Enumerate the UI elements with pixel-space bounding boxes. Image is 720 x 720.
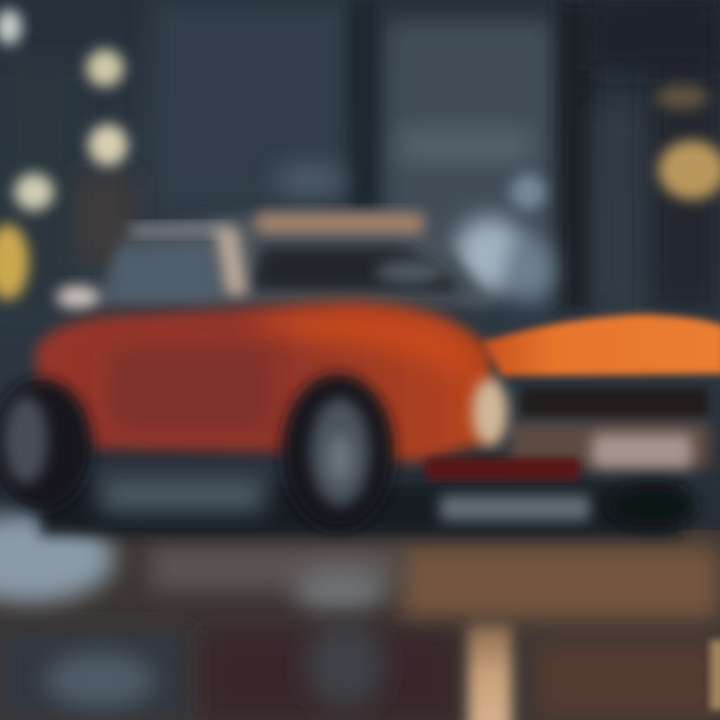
street lights: left side	[0, 9, 128, 300]
body shadow panels	[110, 350, 270, 430]
body highlight	[240, 312, 472, 385]
car front panel	[510, 422, 710, 468]
far front wheel	[608, 484, 696, 528]
car	[0, 212, 720, 535]
street lights: right side	[656, 84, 720, 200]
background: dark city buildings	[0, 0, 720, 560]
car front grille	[522, 388, 708, 418]
headlight	[472, 378, 508, 446]
front bumper	[592, 434, 692, 468]
lower red bumper	[425, 458, 580, 480]
car body side	[35, 302, 495, 462]
car hood	[482, 314, 720, 376]
car cabin and roof	[56, 212, 490, 309]
wet street ground	[0, 513, 720, 720]
rear wheel	[0, 379, 92, 511]
car shadow and spray	[40, 478, 680, 535]
front wheel	[282, 374, 394, 530]
